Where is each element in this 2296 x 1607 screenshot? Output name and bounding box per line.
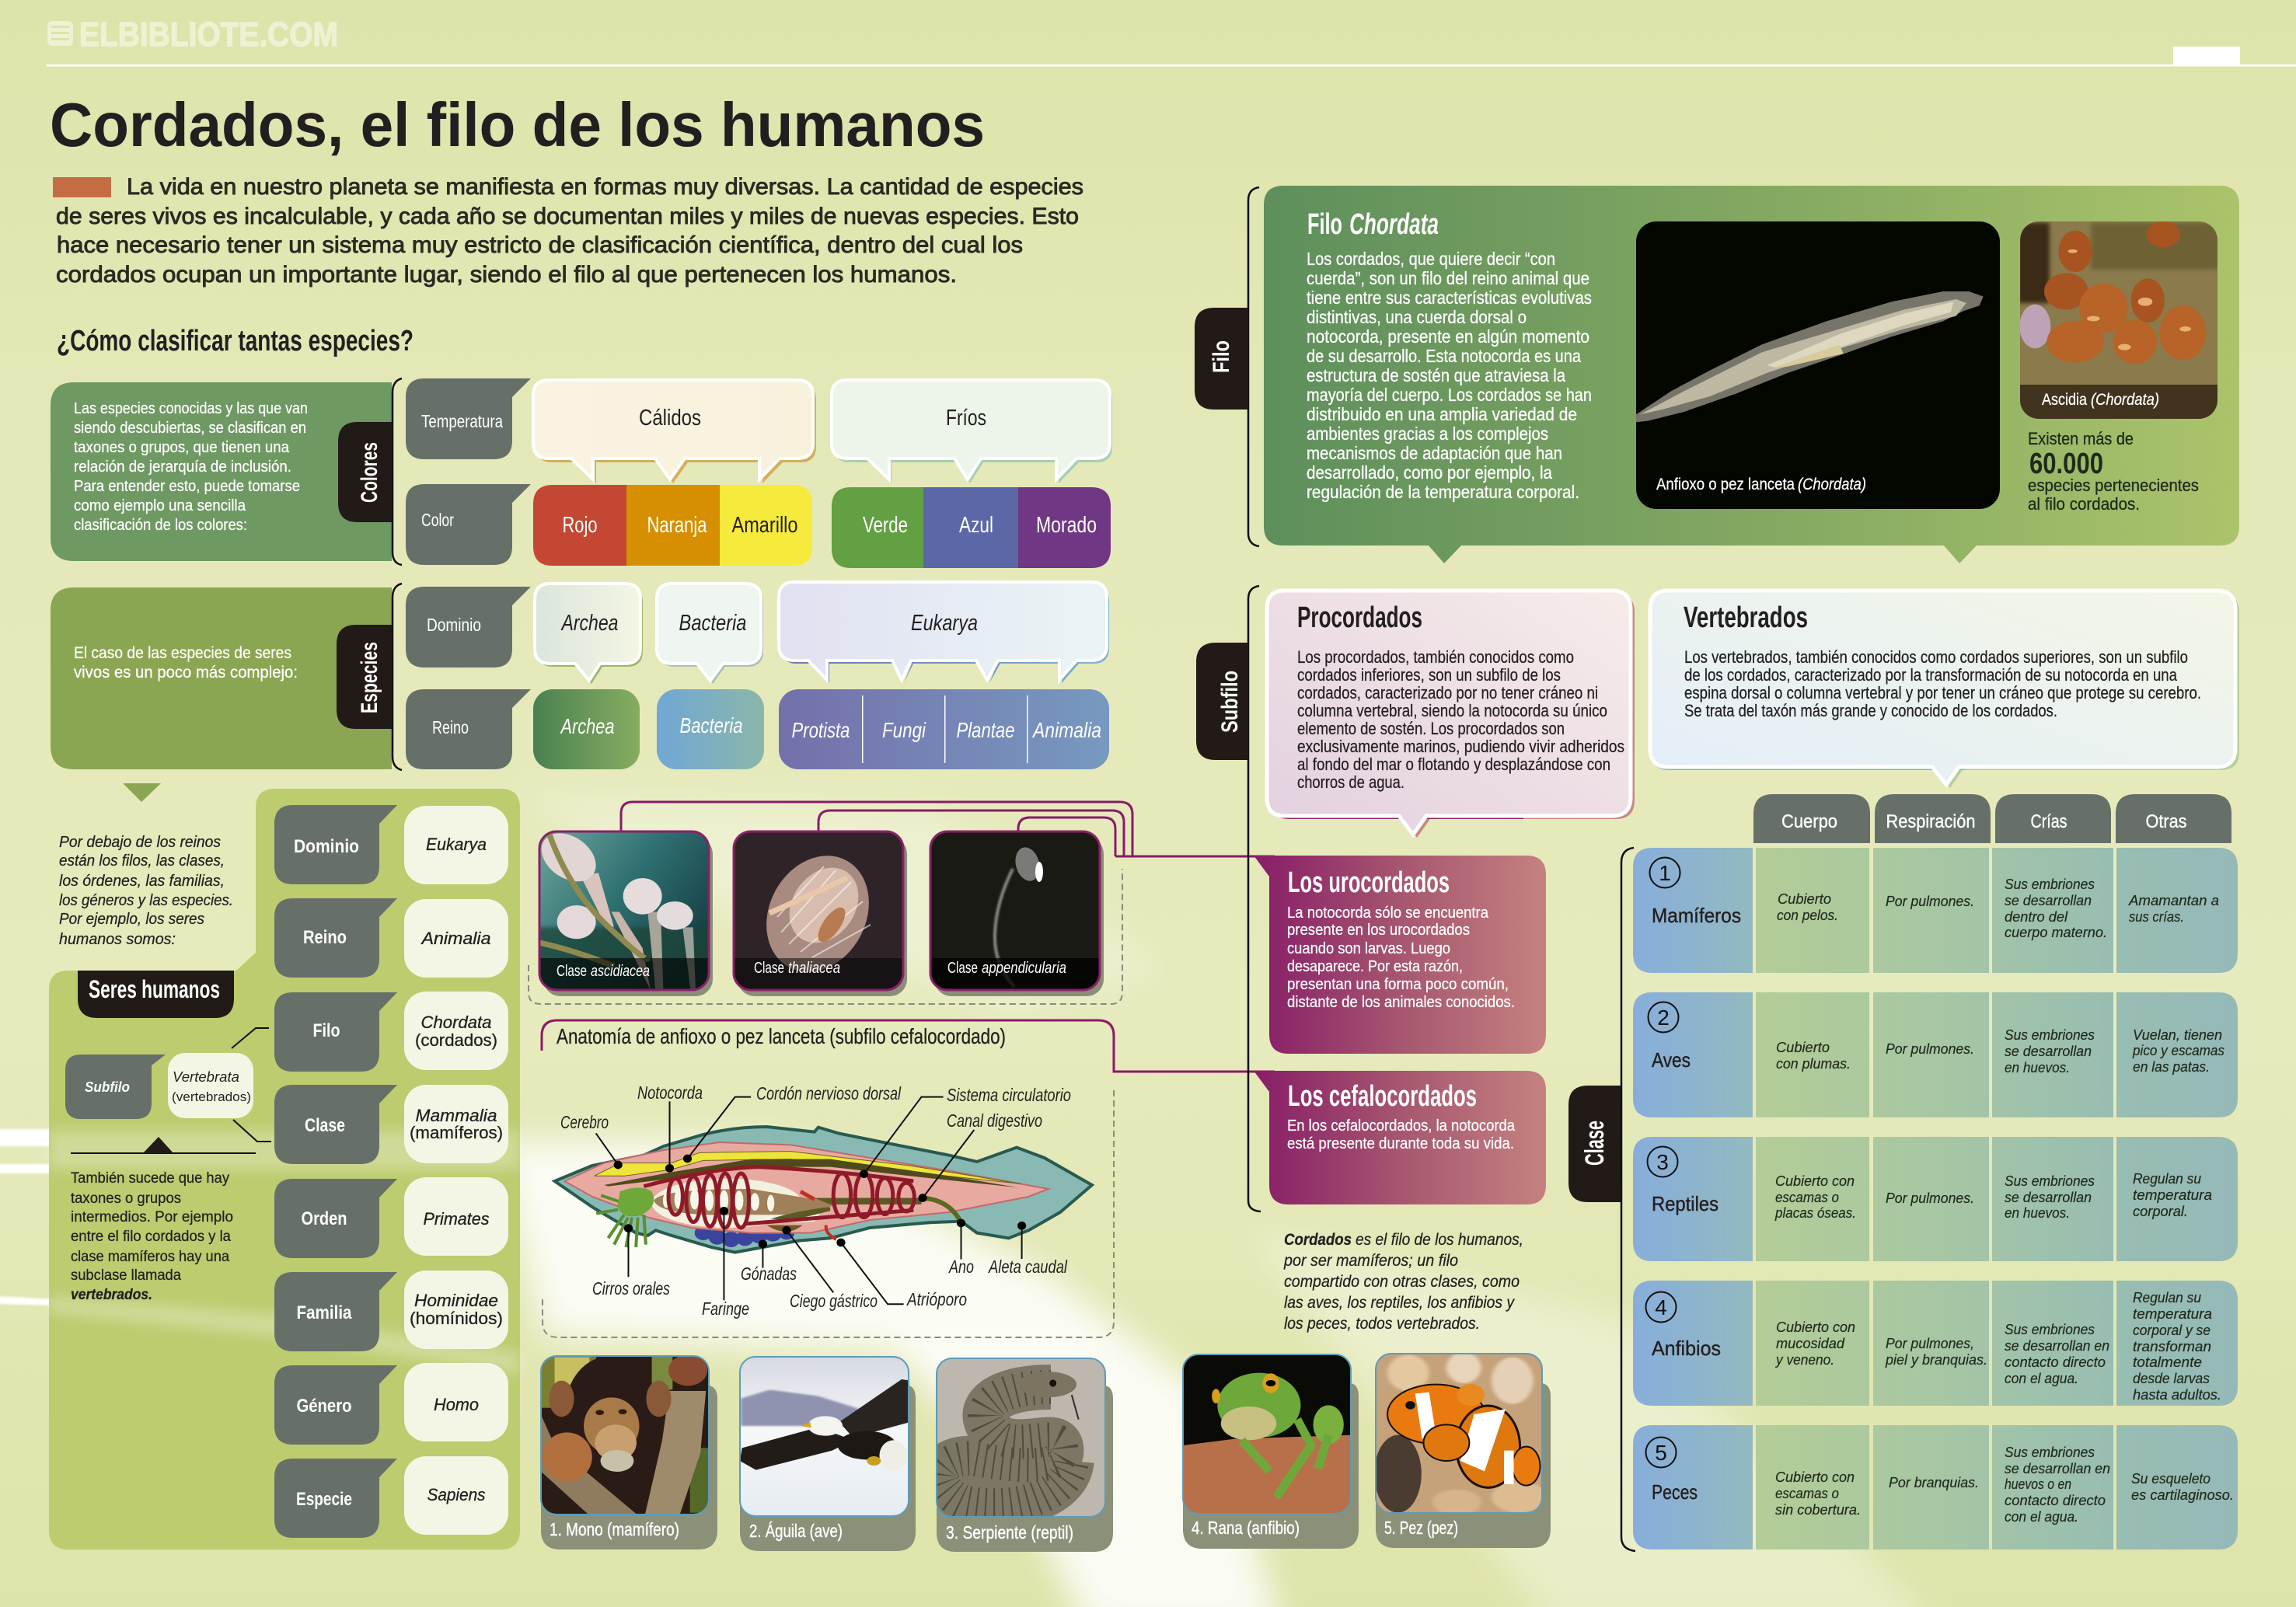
- table row: anfibios: temperatura: [2133, 1306, 2212, 1322]
- panel: urocordados: [1254, 856, 1546, 1054]
- table headers: [1753, 794, 2231, 843]
- panel: filo chordata: ambientes gracias a los complejos: [1307, 424, 1548, 444]
- taxonomy row: reino: Animalia: [420, 929, 491, 948]
- subheading: ¿Cómo clasificar tantas especies?: [57, 325, 413, 357]
- photo card: rana: [1183, 1354, 1359, 1549]
- tab: clase: Clase: [1580, 1121, 1610, 1166]
- bubble: eukarya: Eukarya: [911, 611, 978, 636]
- bubble: procordados: Los procordados, también conocidos como: [1297, 647, 1574, 667]
- table headers: Otras: [2145, 811, 2187, 832]
- panel: filo chordata: notocorda, presente en algún momento: [1307, 326, 1589, 347]
- table row: peces: [1633, 1425, 2238, 1549]
- color bar: cálidos: Rojo: [563, 513, 597, 538]
- photo: clase ascidiacea: Clase: [557, 963, 587, 980]
- photo card: pez: [1374, 1352, 1551, 1548]
- intro text: [53, 174, 1083, 288]
- panel: filo chordata: cuerda”, son un filo del reino animal que: [1307, 268, 1589, 288]
- panel: seres humanos: subclase llamada: [71, 1267, 181, 1284]
- table row: mamíferos: se desarrollan: [2005, 893, 2092, 908]
- panel: cefalocordados: En los cefalocordados, la notocorda: [1287, 1117, 1516, 1135]
- photo: clase ascidiacea: ascidiacea: [591, 963, 650, 980]
- bubble: vertebrados: Los vertebrados, también conocidos como cordados superiores, son un subfilo: [1684, 647, 2188, 667]
- panel: filo chordata: estructura de sostén que atraviesa la: [1307, 365, 1565, 385]
- table row: aves: se desarrollan: [2005, 1044, 2092, 1059]
- photo card: águila: 2. Águila (ave): [749, 1521, 843, 1541]
- text: cordados es el filo: [1283, 1231, 1523, 1333]
- tab: filo: [1195, 308, 1248, 410]
- anatomy labels: Canal digestivo: [947, 1110, 1042, 1131]
- table row: reptiles: Regulan su: [2133, 1171, 2201, 1187]
- taxonomy row: familia: (homínidos): [410, 1309, 503, 1328]
- photo: anfioxo: (Chordata): [1798, 476, 1866, 493]
- stat: 60.000 especies: al filo cordados.: [2028, 494, 2140, 514]
- table row: anfibios: Anfibios: [1652, 1337, 1721, 1360]
- table row: mamíferos: Mamíferos: [1652, 904, 1741, 927]
- color bar: fríos: Azul: [959, 513, 993, 538]
- panel: colores: Para entender esto, puede tomarse: [74, 478, 300, 495]
- bubble: procordados: chorros de agua.: [1297, 772, 1404, 792]
- panel: filo chordata: desarrollado, como por ejemplo, la: [1307, 462, 1552, 483]
- table row: reptiles: corporal.: [2133, 1204, 2188, 1219]
- table row: anfibios: con el agua.: [2005, 1371, 2078, 1386]
- text: por debajo de los reinos: están los filos, las clases,: [59, 852, 225, 870]
- table row: mamíferos: sus crías.: [2129, 909, 2184, 925]
- text: cordados es el filo: los peces, todos vertebrados.: [1284, 1315, 1480, 1333]
- reino: bacteria: Bacteria: [679, 713, 743, 737]
- taxonomy row: reino: Reino: [303, 927, 347, 948]
- anatomy labels: Faringe: [702, 1298, 749, 1319]
- panel: urocordados: desaparece. Por esta razón,: [1287, 958, 1463, 975]
- tab: subfilo: [1196, 643, 1248, 760]
- table row: aves: Vuelan, tienen: [2133, 1027, 2222, 1043]
- text: por debajo de los reinos: los géneros y las especies.: [59, 892, 233, 909]
- photo: clase thaliacea: Clase: [754, 960, 784, 977]
- bubble: cálidos: Cálidos: [639, 406, 701, 431]
- table row: reptiles: escamas o: [1775, 1190, 1839, 1205]
- panel: colores: [51, 378, 531, 565]
- table row: aves: Por pulmones.: [1886, 1041, 1974, 1057]
- reino: archea: [533, 689, 640, 769]
- connectors: urocordados: [621, 802, 1275, 856]
- table row: peces: Por branquias.: [1889, 1475, 1979, 1490]
- bracket: clase: [1621, 848, 1635, 1551]
- text: cordados es el filo: por ser mamíferos; un filo: [1283, 1252, 1458, 1270]
- table row: peces: escamas o: [1775, 1486, 1839, 1501]
- table row: anfibios: Regulan su: [2133, 1290, 2201, 1305]
- taxonomy row: orden: Primates: [423, 1209, 490, 1229]
- table row: anfibios: transforman: [2133, 1339, 2211, 1354]
- logo: ELBIBLIOTE.COM: [79, 16, 338, 54]
- panel: especies: Reino: [432, 717, 469, 737]
- table row: peces: con el agua.: [2005, 1509, 2078, 1525]
- color bar: cálidos: [533, 485, 812, 566]
- title: Cordados, el filo de los humanos: [50, 90, 985, 159]
- connector and dashed frame: anatomía: [542, 1020, 1275, 1337]
- table row: reptiles: [1633, 1137, 2238, 1261]
- panel: colores: Colores: [357, 442, 382, 503]
- photo: clase ascidiacea: [538, 830, 713, 996]
- table row: anfibios: [1633, 1281, 2238, 1406]
- table row: peces: 5: [1655, 1441, 1667, 1465]
- color bar: fríos: Morado: [1036, 513, 1097, 538]
- bubble: cálidos: [533, 380, 816, 483]
- table row: peces: sin cobertura.: [1775, 1502, 1861, 1518]
- table row: peces: huevos o en: [2005, 1476, 2071, 1492]
- table row: reptiles: en huevos.: [2005, 1205, 2070, 1221]
- panel: cefalocordados: [1254, 1071, 1546, 1204]
- panel: seres humanos: entre el filo cordados y la: [71, 1229, 231, 1245]
- table row: anfibios: contacto directo: [2005, 1354, 2106, 1370]
- text: por debajo de los reinos: [59, 834, 233, 948]
- table row: aves: pico y escamas: [2132, 1043, 2224, 1058]
- anatomy labels: Cerebro: [560, 1112, 609, 1132]
- table row: reptiles: Sus embriones: [2005, 1173, 2095, 1189]
- anatomy diagram: [555, 1097, 1092, 1304]
- reino: eukarya: Fungi: [882, 718, 926, 742]
- bubble: procordados: exclusivamente marinos, pudiendo vivir adheridos: [1297, 737, 1624, 756]
- intro text: hace necesario tener un sistema muy estricto de clasificación científica, dentro del cual los: [57, 232, 1023, 258]
- bubble: vertebrados: espina dorsal o columna vertebral y por tener un cráneo que protege su cerebro.: [1684, 683, 2201, 702]
- panel: seres humanos: Subfilo: [85, 1079, 130, 1095]
- bubble: fríos: [832, 380, 1112, 483]
- taxonomy row: orden: [274, 1177, 508, 1258]
- panel: filo chordata: distribuido en una amplia variedad de: [1307, 404, 1577, 424]
- table row: aves: con plumas.: [1776, 1056, 1851, 1072]
- taxonomy row: familia: Hominidae: [414, 1291, 498, 1310]
- taxonomy row: género: [274, 1363, 508, 1445]
- table row: mamíferos: Cubierto: [1778, 891, 1831, 907]
- taxonomy row: clase: Mammalia: [415, 1106, 497, 1125]
- bubble: procordados: al fondo del mar o flotando y desplazándose con: [1297, 755, 1610, 774]
- panel: filo chordata: tiene entre sus características evolutivas: [1307, 288, 1592, 308]
- anatomy labels: Cirros orales: [592, 1278, 670, 1298]
- photo: ascidia: Ascidia: [2042, 391, 2087, 409]
- photo: clase appendicularia: appendicularia: [982, 960, 1066, 977]
- table row: anfibios: piel y branquias.: [1885, 1352, 1987, 1368]
- anatomy labels: Gónadas: [741, 1264, 797, 1284]
- panel: especies: Especies: [357, 642, 382, 713]
- table row: aves: en las patas.: [2133, 1059, 2210, 1075]
- tab: clase: [1568, 1086, 1621, 1202]
- table row: anfibios: y veneno.: [1774, 1352, 1834, 1368]
- text: cordados es el filo: compartido con otras clases, como: [1284, 1273, 1520, 1291]
- panel: colores: siendo descubiertas, se clasifican en: [74, 420, 306, 437]
- taxonomy row: dominio: [274, 805, 508, 884]
- anatomy labels: Sistema circulatorio: [947, 1085, 1071, 1105]
- panel: cefalocordados: está presente durante toda su vida.: [1287, 1135, 1514, 1152]
- table row: peces: Peces: [1652, 1480, 1698, 1504]
- table row: peces: Sus embriones: [2005, 1445, 2095, 1460]
- reino: eukarya: [779, 689, 1109, 769]
- text: por debajo de los reinos: Por ejemplo, los seres: [59, 911, 204, 928]
- bubble: procordados: Procordados: [1297, 601, 1422, 634]
- table row: mamíferos: Sus embriones: [2005, 877, 2095, 892]
- color bar: fríos: Verde: [863, 513, 908, 538]
- taxonomy row: filo: Filo: [312, 1020, 340, 1041]
- color bar: cálidos: Naranja: [647, 513, 707, 538]
- photo: ascidia: [2019, 221, 2221, 419]
- bubble: procordados: elemento de sostén. Los procordados son: [1297, 719, 1565, 738]
- panel: urocordados: presente en los urocordados: [1287, 922, 1470, 939]
- table row: anfibios: totalmente: [2133, 1354, 2202, 1370]
- panel: urocordados: presentan una forma poco común,: [1287, 976, 1509, 993]
- intro text: de seres vivos es incalculable, y cada año se documentan miles y miles de nuevas especies. Esto: [56, 204, 1079, 229]
- photo: anfioxo: [1636, 221, 2000, 509]
- panel: filo chordata: Los cordados, que quiere decir “con: [1307, 249, 1555, 269]
- taxonomy row: clase: Clase: [305, 1115, 345, 1136]
- panel: especies: El caso de las especies de seres: [74, 644, 291, 662]
- table row: peces: Su esqueleto: [2131, 1471, 2211, 1487]
- table row: mamíferos: Amamantan a: [2128, 893, 2219, 908]
- photo card: rana: 4. Rana (anfibio): [1192, 1518, 1300, 1538]
- reino: archea: Archea: [560, 714, 614, 738]
- anatomy labels: Ano: [947, 1257, 974, 1277]
- panel: seres humanos: taxones o grupos: [71, 1190, 181, 1207]
- table row: anfibios: 4: [1655, 1295, 1667, 1319]
- table row: peces: contacto directo: [2005, 1493, 2106, 1508]
- table row: reptiles: temperatura: [2133, 1187, 2212, 1203]
- photo card: pez: 5. Pez (pez): [1384, 1518, 1458, 1538]
- taxonomy row: clase: [274, 1085, 508, 1164]
- table headers: Crías: [2030, 811, 2067, 832]
- table row: aves: 2: [1657, 1006, 1670, 1030]
- panel: filo chordata: regulación de la temperatura corporal.: [1307, 482, 1579, 502]
- panel: urocordados: cuando son larvas. Luego: [1287, 940, 1450, 957]
- photo: clase appendicularia: [930, 831, 1104, 996]
- anatomy labels: Atrióporo: [905, 1289, 967, 1309]
- panel: cefalocordados: Los cefalocordados: [1288, 1080, 1477, 1113]
- text: cordados es el filo: es el filo de los humanos,: [1356, 1231, 1523, 1249]
- panel: filo chordata: mayoría del cuerpo. Los cordados se han: [1307, 385, 1592, 405]
- text: por debajo de los reinos: humanos somos:: [59, 931, 176, 948]
- table row: mamíferos: 1: [1659, 861, 1671, 885]
- bubble: bacteria: Bacteria: [679, 611, 746, 636]
- bubble: vertebrados: Se trata del taxón más grande y conocido de los cordados.: [1684, 701, 2057, 720]
- reino: eukarya: Animalia: [1031, 718, 1101, 742]
- bubble: procordados: [1267, 591, 1635, 838]
- bubble: procordados: cordados, caracterizado por no tener cráneo ni: [1297, 683, 1598, 702]
- text: cordados es el filo: Cordados: [1284, 1231, 1352, 1249]
- table row: reptiles: 3: [1656, 1150, 1669, 1174]
- taxonomy row: filo: Chordata: [421, 1013, 491, 1032]
- reino: eukarya: Protista: [791, 718, 850, 742]
- anatomy labels: Cordón nervioso dorsal: [756, 1083, 902, 1103]
- photo card: serpiente: [937, 1358, 1113, 1552]
- panel: urocordados: Los urocordados: [1288, 866, 1450, 899]
- text: cordados es el filo: las aves, los reptiles, los anfibios y: [1284, 1294, 1515, 1312]
- panel: colores: como ejemplo una sencilla: [74, 497, 246, 514]
- table row: anfibios: mucosidad: [1776, 1336, 1845, 1351]
- stat: 60.000 especies: 60.000: [2029, 448, 2103, 480]
- panel: especies: vivos es un poco más complejo:: [74, 664, 298, 681]
- table row: anfibios: corporal y se: [2133, 1323, 2211, 1338]
- anatomy labels: Aleta caudal: [987, 1257, 1068, 1277]
- photo: clase appendicularia: Clase: [947, 960, 978, 977]
- table row: reptiles: Reptiles: [1652, 1192, 1719, 1215]
- table row: mamíferos: [1633, 848, 2238, 973]
- taxonomy row: reino: [274, 898, 508, 978]
- intro text: cordados ocupan un importante lugar, siendo el filo al que pertenecen los humanos.: [56, 262, 957, 288]
- arrow: down triangle: [123, 783, 161, 802]
- taxonomy row: especie: [274, 1456, 508, 1538]
- photo: anfioxo: Anfioxo o pez lanceta: [1656, 476, 1795, 493]
- panel: colores: Color: [421, 510, 454, 530]
- stat: 60.000 especies: [2028, 429, 2199, 514]
- table row: aves: Aves: [1652, 1048, 1691, 1072]
- bubble: bacteria: [657, 584, 763, 684]
- taxonomy row: dominio: Eukarya: [426, 835, 487, 854]
- taxonomy row: especie: Sapiens: [427, 1485, 485, 1504]
- table row: mamíferos: dentro del: [2005, 909, 2068, 925]
- photo card: mono: 1. Mono (mamífero): [550, 1519, 679, 1539]
- text: por debajo de los reinos: Por debajo de los reinos: [59, 834, 221, 851]
- table headers: Cuerpo: [1781, 811, 1837, 832]
- table row: reptiles: Por pulmones.: [1886, 1190, 1974, 1206]
- panel: seres humanos: (vertebrados): [172, 1089, 251, 1104]
- panel: urocordados: distante de los animales conocidos.: [1287, 994, 1515, 1011]
- anatomy labels: Ciego gástrico: [790, 1291, 878, 1311]
- table row: reptiles: placas óseas.: [1774, 1205, 1856, 1221]
- panel: seres humanos: Seres humanos: [89, 975, 220, 1003]
- panel: filo chordata: Chordata: [1349, 208, 1439, 241]
- bubble: procordados: cordados inferiores, son un subfilo de los: [1297, 665, 1561, 685]
- color bar: fríos: [832, 487, 1111, 568]
- taxonomy row: familia: Familia: [297, 1302, 352, 1323]
- taxonomy row: género: Género: [297, 1396, 351, 1417]
- table row: peces: se desarrollan en: [2005, 1461, 2110, 1476]
- bubble: eukarya: [779, 582, 1109, 683]
- panel: filo chordata: de su desarrollo. Esta notocorda es una: [1307, 346, 1581, 366]
- taxonomy row: especie: Especie: [296, 1489, 352, 1510]
- table row: aves: en huevos.: [2005, 1060, 2070, 1075]
- photo card: mono: [541, 1354, 717, 1549]
- tab: subfilo: Subfilo: [1217, 671, 1243, 733]
- panel: especies: Dominio: [427, 615, 481, 635]
- table row: anfibios: Cubierto con: [1776, 1319, 1855, 1335]
- axis: filo and subfilo bracket: [1248, 187, 1261, 1211]
- panel: especies: [51, 584, 531, 770]
- taxonomy row: género: Homo: [434, 1395, 479, 1414]
- photo: clase thaliacea: thaliacea: [788, 960, 840, 977]
- taxonomy row: filo: (cordados): [415, 1030, 497, 1050]
- panel: filo chordata: Filo: [1307, 208, 1342, 241]
- intro text: La vida en nuestro planeta se manifiesta en formas muy diversas. La cantidad de especies: [127, 174, 1083, 200]
- anatomy labels: Notocorda: [637, 1082, 703, 1103]
- table row: aves: Sus embriones: [2005, 1027, 2095, 1043]
- panel: colores: clasificación de los colores:: [74, 517, 247, 534]
- table row: anfibios: se desarrollan en: [2005, 1338, 2109, 1354]
- panel: seres humanos: intermedios. Por ejemplo: [71, 1209, 233, 1225]
- table row: reptiles: se desarrollan: [2005, 1190, 2092, 1205]
- panel: colores: relación de jerarquía de inclusión.: [74, 458, 291, 476]
- bubble: fríos: Fríos: [946, 406, 986, 431]
- taxonomy row: clase: (mamíferos): [410, 1123, 503, 1142]
- panel: seres humanos: [49, 789, 520, 1549]
- panel: filo chordata: mecanismos de adaptación que han: [1307, 443, 1562, 463]
- table row: mamíferos: con pelos.: [1777, 908, 1838, 923]
- text: por debajo de los reinos: los órdenes, las familias,: [59, 873, 225, 890]
- bubble: archea: Archea: [560, 611, 619, 636]
- panel: seres humanos: Vertebrata: [173, 1069, 239, 1085]
- table row: anfibios: hasta adultos.: [2133, 1387, 2221, 1403]
- panel: urocordados: La notocorda sólo se encuentra: [1287, 905, 1489, 922]
- stat: 60.000 especies: especies pertenecientes: [2028, 476, 2199, 495]
- panel: seres humanos: También sucede que hay: [71, 1170, 229, 1187]
- table row: peces: es cartilaginoso.: [2131, 1487, 2234, 1503]
- table row: anfibios: Por pulmones,: [1886, 1336, 1974, 1351]
- panel: colores: Las especies conocidas y las que van: [74, 400, 308, 417]
- color bar: cálidos: Amarillo: [732, 513, 797, 538]
- photo card: águila: [740, 1357, 916, 1551]
- bubble: archea: [535, 584, 643, 684]
- panel: seres humanos: clase mamíferos hay una: [71, 1249, 229, 1265]
- taxonomy row: familia: [274, 1271, 508, 1351]
- photo card: serpiente: 3. Serpiente (reptil): [946, 1522, 1073, 1543]
- table row: peces: Cubierto con: [1775, 1469, 1855, 1485]
- table row: mamíferos: cuerpo materno.: [2005, 925, 2107, 940]
- taxonomy row: orden: Orden: [302, 1208, 347, 1229]
- heading: anatomía: Anatomía de anfioxo o pez lanceta (subfilo cefalocordado): [557, 1024, 1006, 1048]
- photo: clase thaliacea: [734, 831, 907, 996]
- stat: 60.000 especies: Existen más de: [2028, 429, 2134, 448]
- anatomy labels: [560, 1082, 1071, 1319]
- bubble: vertebrados: Vertebrados: [1684, 601, 1808, 634]
- reino: bacteria: [657, 689, 764, 769]
- bubble: procordados: columna vertebral, siendo la notocorda su único: [1297, 701, 1607, 720]
- table row: mamíferos: Por pulmones.: [1886, 894, 1974, 909]
- taxonomy row: filo: [274, 992, 508, 1072]
- panel: filo chordata: distintivas, una cuerda dorsal o: [1307, 307, 1527, 327]
- panel: filo chordata: [1264, 186, 2239, 563]
- taxonomy row: dominio: Dominio: [294, 836, 359, 857]
- photo: ascidia: (Chordata): [2091, 391, 2159, 409]
- bubble: vertebrados: de los cordados, caracterizado por la transformación de su notocorda en una: [1684, 665, 2178, 685]
- table row: aves: [1633, 992, 2238, 1117]
- table row: reptiles: Cubierto con: [1775, 1173, 1855, 1189]
- panel: colores: Temperatura: [421, 411, 503, 431]
- table row: aves: Cubierto: [1776, 1040, 1830, 1055]
- bubble: vertebrados: [1650, 591, 2239, 788]
- table row: anfibios: Sus embriones: [2005, 1322, 2095, 1337]
- table headers: Respiración: [1886, 811, 1976, 832]
- tab: filo: Filo: [1209, 340, 1234, 373]
- table row: anfibios: desde larvas: [2133, 1371, 2210, 1386]
- reino: eukarya: Plantae: [956, 718, 1015, 742]
- panel: seres humanos: vertebrados.: [71, 1287, 152, 1303]
- panel: colores: taxones o grupos, que tienen una: [74, 439, 290, 456]
